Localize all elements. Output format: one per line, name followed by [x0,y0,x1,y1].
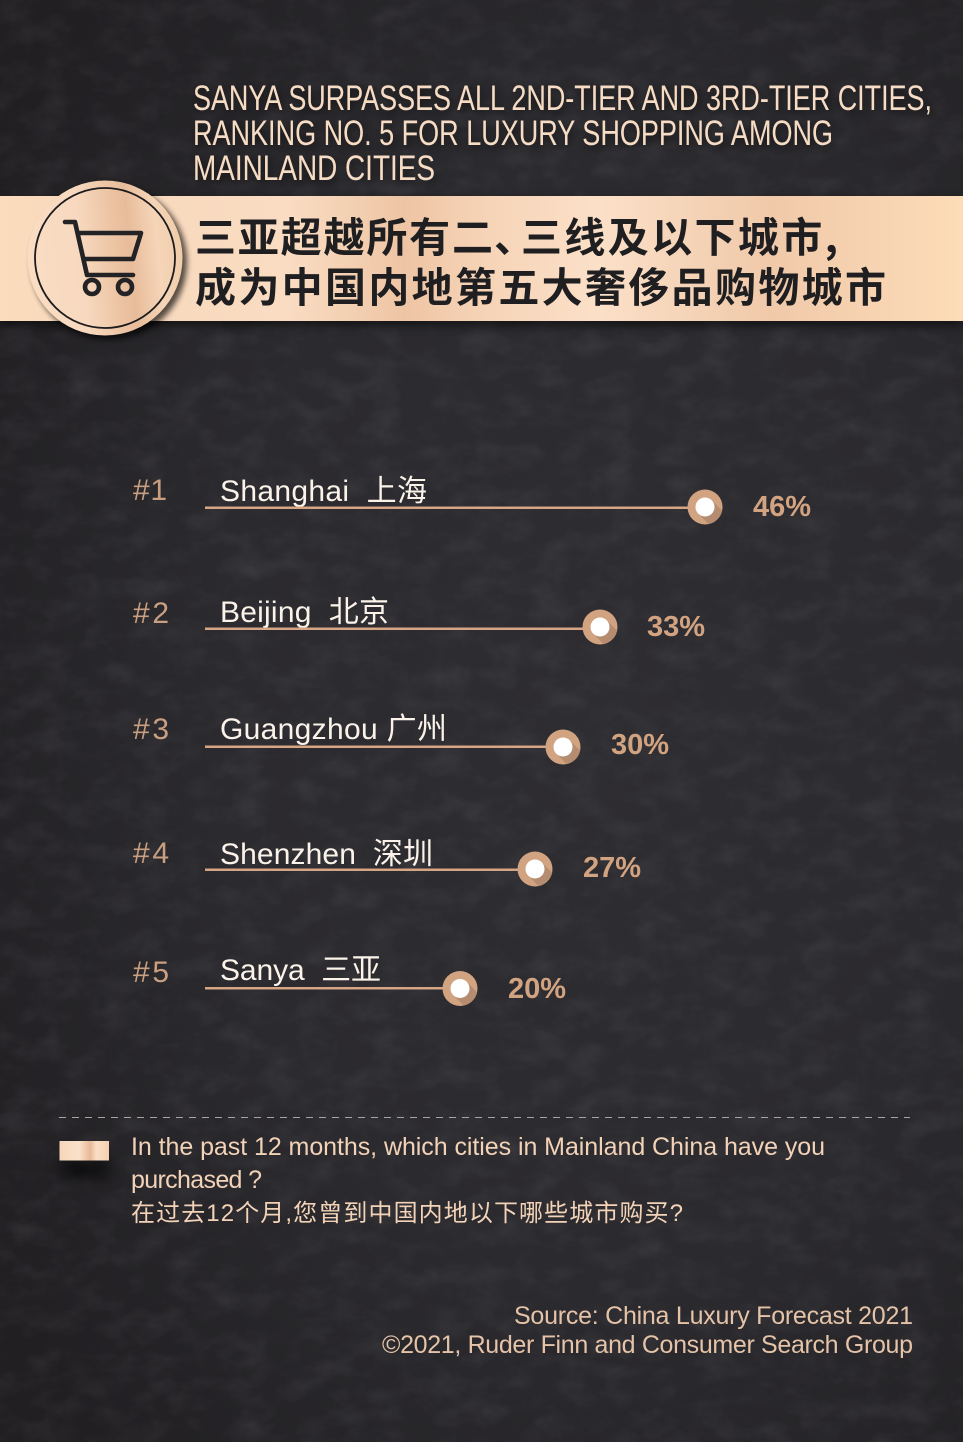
row 4: Shenzhen 27%: #4 [133,837,169,870]
row 3: Guangzhou 30%: #3 [133,713,169,746]
row 5: Sanya 20%: 20% [508,973,566,1005]
row 3: Guangzhou 30%: Guangzhou 广州 [220,713,447,746]
row 1: Shanghai 46%: #1 [133,474,167,507]
heading: Chinese title [195,204,886,314]
row 2: Beijing 33% [133,596,705,644]
legend swatch [60,1141,109,1178]
text block: source: Source: China Luxury Forecast 2021 [514,1302,913,1330]
row 5: Sanya 20%: #5 [133,956,169,989]
heading: Chinese title: 成为中国内地第五大奢侈品购物城市 [195,254,886,314]
heading: Chinese title: 三亚超越所有二 [195,204,493,264]
row 5: Sanya 20%: Sanya 三亚 [220,954,381,987]
text block: survey question [131,1133,825,1227]
text block: survey question: 在过去12个月,您曾到中国内地以下哪些城市购买? [131,1200,683,1227]
icon: shopping cart medallion [28,180,187,340]
row 1: Shanghai 46%: Shanghai 上海 [220,475,427,508]
text block: survey question: purchased ? [131,1166,262,1194]
heading: Chinese title: 、 [494,204,535,264]
row 2: Beijing 33%: #2 [133,597,169,630]
row 3: Guangzhou 30% [133,713,669,764]
text block: survey question: In the past 12 months, which cities in Mainland China have you [131,1133,825,1161]
row 4: Shenzhen 27% [133,837,641,886]
row 4: Shenzhen 27%: 27% [583,852,641,884]
banner: Chinese heading ribbon [0,196,963,326]
row 3: Guangzhou 30%: 30% [611,729,669,761]
chart: top cities for luxury purchases [133,474,811,1006]
title: English heading: MAINLAND CITIES [193,149,435,188]
text block: source: ©2021, Ruder Finn and Consumer Search Group [382,1331,913,1359]
heading: Chinese title: 三线及以下城市, [521,204,838,264]
text block: source [382,1302,913,1359]
row 5: Sanya 20% [133,954,566,1006]
row 1: Shanghai 46% [133,474,811,524]
row 1: Shanghai 46%: 46% [753,491,811,523]
row 2: Beijing 33%: Beijing 北京 [220,596,389,629]
row 2: Beijing 33%: 33% [647,611,705,643]
title: English heading [193,79,932,188]
row 4: Shenzhen 27%: Shenzhen 深圳 [220,838,433,871]
icon: cart [65,222,141,294]
